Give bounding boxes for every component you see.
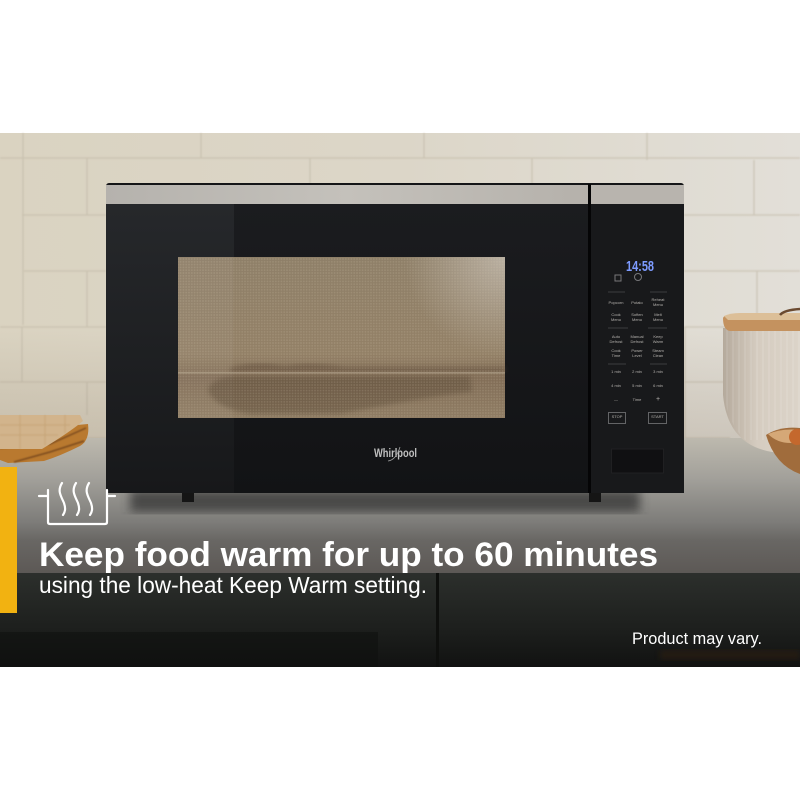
defrost and cook keys: Warm bbox=[653, 339, 664, 344]
subheading: using the low-heat Keep Warm setting. bbox=[39, 572, 427, 598]
stop button bbox=[608, 412, 626, 424]
time adjust keys: + bbox=[656, 396, 660, 403]
defrost and cook keys: Time bbox=[612, 353, 621, 358]
menu keys: Menu bbox=[611, 317, 621, 322]
menu keys: Melt bbox=[654, 312, 663, 317]
defrost and cook keys: Level bbox=[632, 353, 642, 358]
defrost and cook keys: Keep bbox=[653, 334, 663, 339]
quick minute keys: 5 min bbox=[632, 383, 642, 388]
menu keys: Popcorn bbox=[609, 300, 623, 305]
ceramic canister with wooden lid bbox=[723, 309, 800, 453]
quick minute keys: 3 min bbox=[653, 369, 663, 374]
stop button: STOP bbox=[612, 414, 623, 419]
control panel bbox=[608, 258, 667, 473]
microwave feet bbox=[182, 492, 601, 502]
quick minute keys: 4 min bbox=[611, 383, 621, 388]
time adjust keys bbox=[614, 396, 660, 403]
start button: START bbox=[651, 414, 664, 419]
quick minute keys: 2 min bbox=[632, 369, 642, 374]
quick minute keys: 6 min bbox=[653, 383, 663, 388]
wooden bowl with fruit bbox=[766, 428, 800, 474]
menu keys: Soften bbox=[631, 312, 643, 317]
quick minute keys bbox=[608, 364, 667, 388]
icon: pot with steam bbox=[39, 483, 115, 524]
menu keys: Menu bbox=[653, 317, 663, 322]
defrost and cook keys: Defrost bbox=[610, 339, 623, 344]
display status icons bbox=[615, 274, 642, 281]
microwave shadow on counter bbox=[130, 490, 640, 512]
defrost and cook keys: Power bbox=[631, 348, 643, 353]
door glass bbox=[106, 204, 588, 493]
control panel surface bbox=[591, 204, 684, 493]
time adjust keys: Time bbox=[633, 397, 642, 402]
door release panel bbox=[612, 449, 664, 473]
defrost and cook keys: Auto bbox=[612, 334, 621, 339]
quick minute keys: 1 min bbox=[611, 369, 621, 374]
microwave body bbox=[106, 183, 684, 493]
microwave bbox=[106, 183, 684, 502]
defrost and cook keys: Cook bbox=[611, 348, 621, 353]
menu keys bbox=[608, 292, 667, 322]
time adjust keys: — bbox=[614, 397, 618, 402]
start button bbox=[648, 412, 666, 424]
control panel top trim bbox=[591, 185, 684, 204]
Whirlpool logo: Whirlpool bbox=[374, 446, 417, 460]
defrost and cook keys: Manual bbox=[630, 334, 644, 339]
menu keys: Cook bbox=[611, 312, 621, 317]
heading: Keep food warm for up to 60 minutes bbox=[39, 536, 658, 574]
folded kitchen towel bbox=[0, 415, 88, 463]
digital clock display: 14:58 bbox=[626, 258, 654, 275]
disclaimer: Product may vary. bbox=[632, 630, 762, 648]
door window with mesh bbox=[178, 257, 505, 418]
menu keys: Potato bbox=[631, 300, 644, 305]
defrost and cook keys bbox=[608, 328, 667, 358]
dark lower cabinet bbox=[0, 573, 800, 667]
menu keys: Menu bbox=[653, 302, 663, 307]
defrost and cook keys: Defrost bbox=[631, 339, 644, 344]
countertop bbox=[0, 438, 800, 574]
door seam bbox=[588, 184, 591, 493]
photo: kitchen scene background bbox=[0, 133, 800, 667]
yellow accent bar bbox=[0, 467, 17, 613]
menu keys: Menu bbox=[632, 317, 642, 322]
defrost and cook keys: Clean bbox=[653, 353, 663, 358]
defrost and cook keys: Steam bbox=[652, 348, 664, 353]
menu keys: Reheat bbox=[652, 297, 665, 302]
tiled wall bbox=[0, 133, 800, 443]
stainless top trim bbox=[106, 185, 588, 204]
